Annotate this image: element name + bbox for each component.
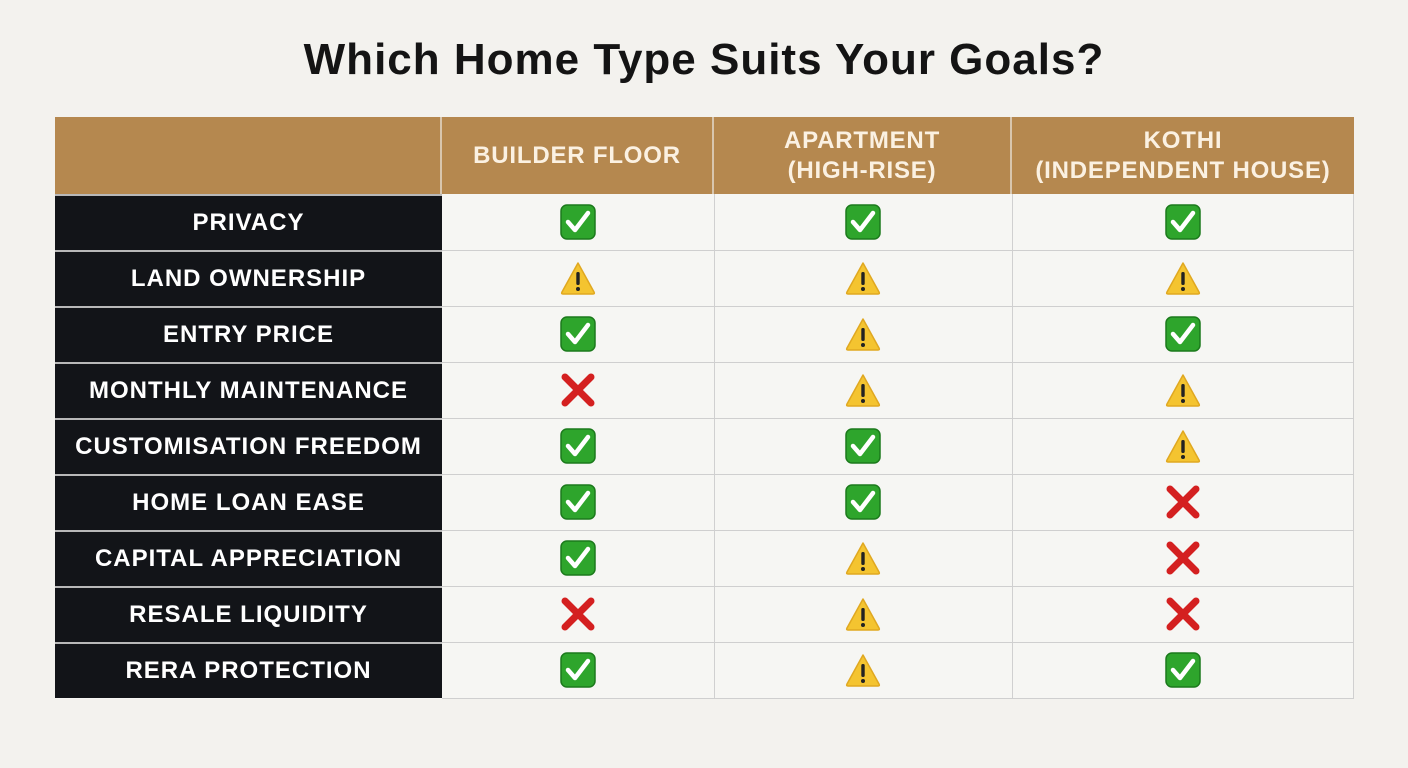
label: monthly maintenance bbox=[55, 362, 442, 418]
label: entry price: ENTRY PRICE bbox=[163, 321, 334, 348]
header: blank bbox=[55, 117, 442, 194]
label: land ownership: LAND OWNERSHIP bbox=[131, 265, 366, 292]
label: monthly maintenance: MONTHLY MAINTENANCE bbox=[89, 377, 408, 404]
label: land ownership bbox=[55, 250, 442, 306]
header: builder floor bbox=[442, 117, 714, 194]
label: capital appreciation: CAPITAL APPRECIATION bbox=[95, 545, 402, 572]
header: kothi bbox=[1012, 117, 1354, 194]
header: kothi: KOTHI bbox=[1144, 126, 1222, 154]
title: Which Home Type Suits Your Goals? bbox=[304, 35, 1104, 84]
header: apartment bbox=[714, 117, 1012, 194]
header: apartment: (HIGH-RISE) bbox=[788, 156, 936, 184]
header: builder floor: BUILDER FLOOR bbox=[473, 142, 681, 168]
label: home loan ease bbox=[55, 474, 442, 530]
table bbox=[55, 117, 1354, 699]
label: resale liquidity bbox=[55, 586, 442, 642]
label: entry price bbox=[55, 306, 442, 362]
label: customisation freedom bbox=[55, 418, 442, 474]
header: kothi: (INDEPENDENT HOUSE) bbox=[1035, 156, 1331, 184]
label: capital appreciation bbox=[55, 530, 442, 586]
header: apartment: APARTMENT bbox=[784, 126, 940, 154]
label: home loan ease: HOME LOAN EASE bbox=[132, 489, 365, 516]
label: privacy bbox=[55, 194, 442, 250]
label: rera protection: RERA PROTECTION bbox=[125, 657, 372, 684]
label: rera protection bbox=[55, 642, 442, 698]
label: privacy: PRIVACY bbox=[193, 209, 304, 236]
label: resale liquidity: RESALE LIQUIDITY bbox=[129, 601, 368, 628]
label: customisation freedom: CUSTOMISATION FREEDOM bbox=[75, 433, 422, 460]
